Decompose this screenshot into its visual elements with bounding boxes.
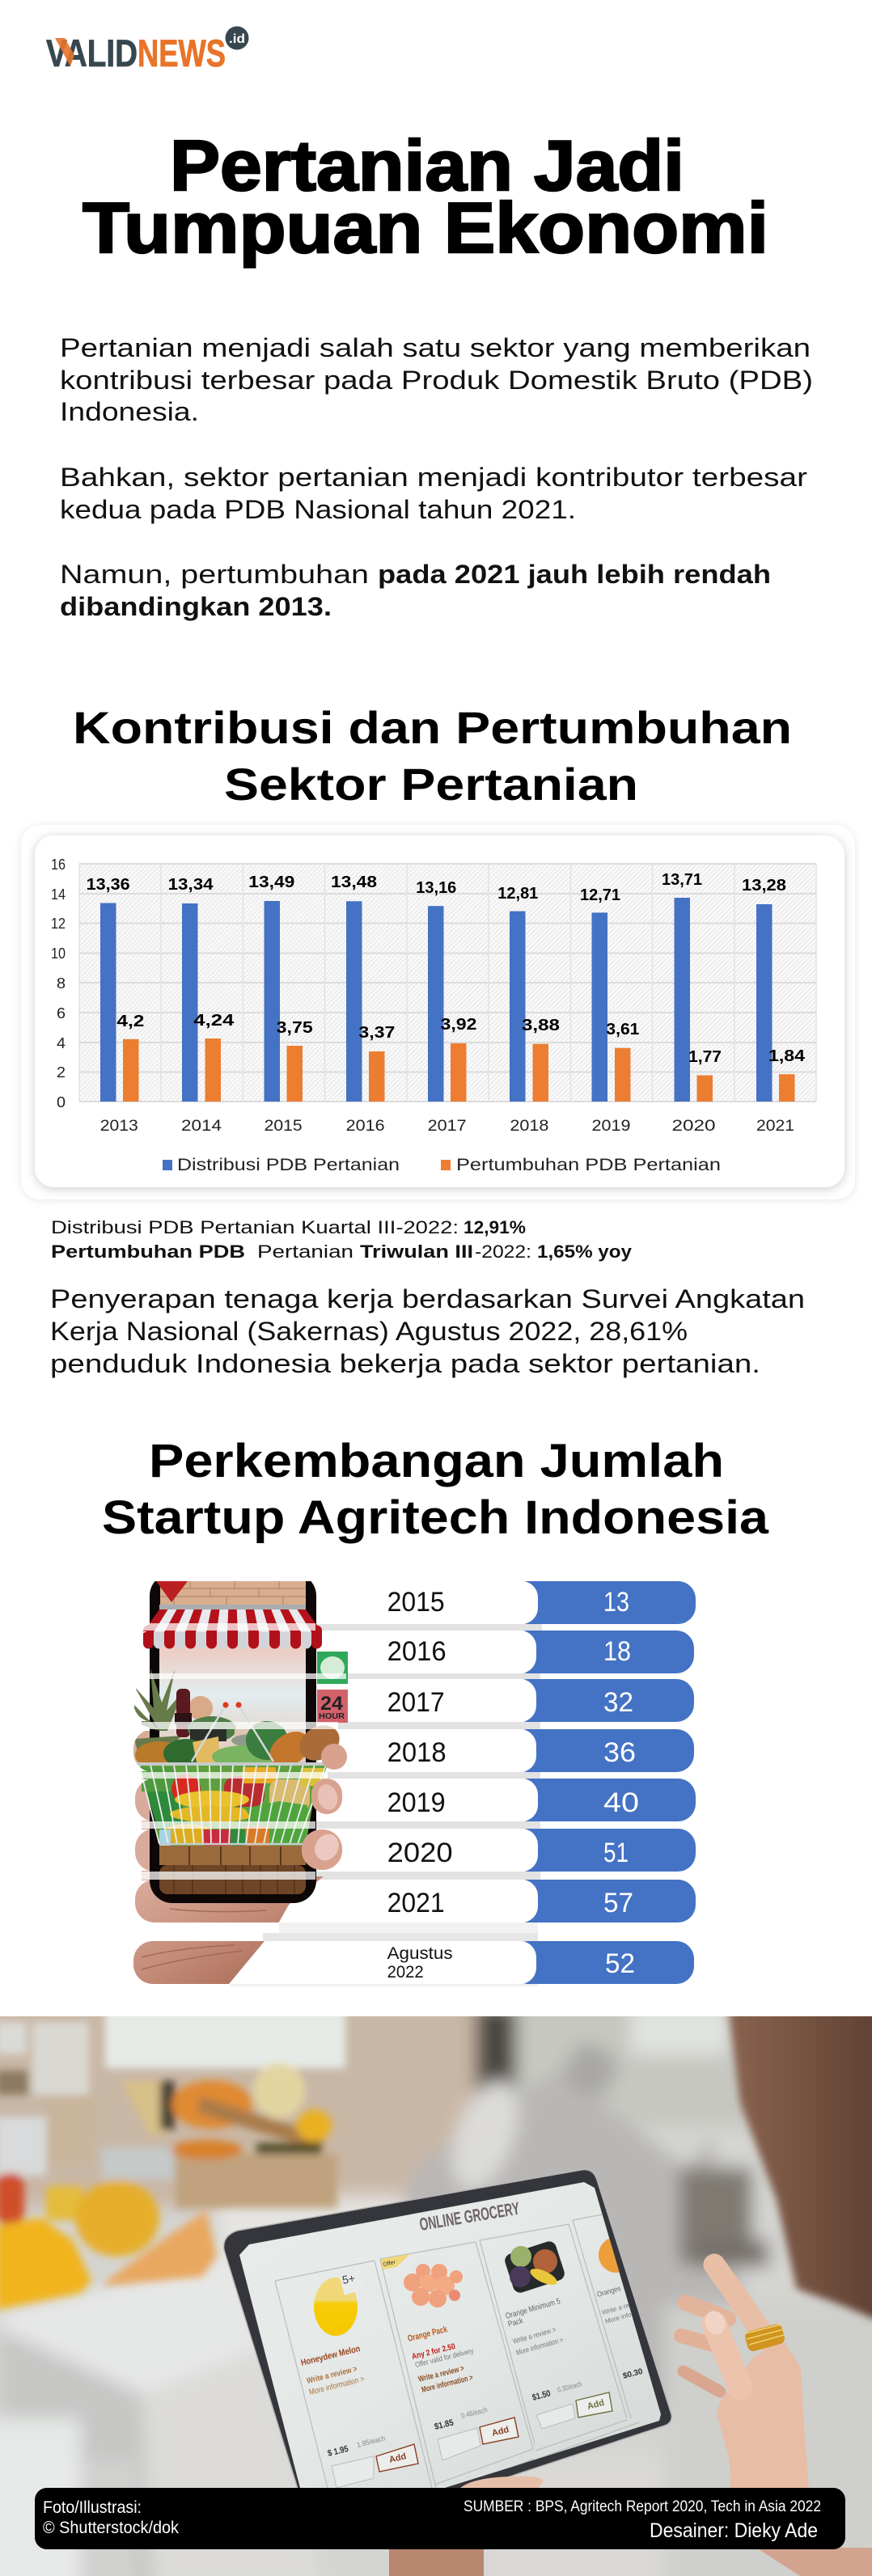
logo: Validnews.id	[46, 26, 249, 74]
product: fruit tray: Orange Minimum 5	[505, 2297, 561, 2321]
phone screen window	[159, 1605, 306, 1766]
side signs: HOUR	[319, 1712, 345, 1721]
source and designer: SUMBER : BPS, Agritech Report 2020, Tech in Asia 2022	[464, 2498, 821, 2515]
product: honeydew melon: Honeydew Melon	[300, 2344, 362, 2368]
product: orange pack	[381, 2254, 519, 2460]
employment paragraph: penduduk Indonesia bekerja pada sektor pertanian.	[50, 1349, 760, 1378]
data labels: distribusi: 12,81	[497, 885, 538, 903]
y axis labels: 14	[51, 886, 66, 903]
data labels: pertumbuhan: 3,88	[522, 1017, 560, 1034]
hand holding tablet	[389, 2477, 872, 2576]
intro text block: kedua pada PDB Nasional tahun 2021.	[60, 495, 576, 524]
intro text block: dibandingkan 2013.	[60, 592, 332, 621]
heading: Perkembangan Jumlah Startup	[102, 1435, 769, 1544]
screen title: ONLINE GROCERY	[418, 2198, 521, 2235]
photo credit: Foto/Illustrasi:	[43, 2498, 142, 2517]
data labels: pertumbuhan: 4,2	[116, 1013, 144, 1030]
stat lines: -2022:	[475, 1241, 531, 1262]
data labels: distribusi	[87, 871, 786, 904]
blurred room background	[0, 1998, 872, 2576]
logo: Validnews.id: .id	[229, 32, 245, 46]
illustration: grocery store phone in hand	[129, 1573, 348, 1984]
data labels: pertumbuhan: 4,24	[193, 1012, 235, 1030]
product: fruit tray: Pack	[507, 2316, 525, 2329]
product: orange pack: More information >	[421, 2373, 474, 2395]
data labels: pertumbuhan: 3,92	[440, 1016, 477, 1034]
phone body	[150, 1573, 316, 1903]
product: oranges: Oranges	[596, 2284, 622, 2299]
employment paragraph: Kerja Nasional (Sakernas) Agustus 2022, 28,61%	[50, 1317, 688, 1346]
title: Tumpuan Ekonomi	[83, 188, 768, 268]
photo: woman shopping for groceries on tablet	[0, 1998, 872, 2576]
stat lines: 1,65% yoy	[537, 1241, 633, 1262]
x axis labels: 2018	[510, 1118, 548, 1135]
photo credit	[43, 2498, 179, 2537]
panel: startup table	[129, 1573, 696, 1986]
x axis labels: 2015	[265, 1118, 303, 1135]
y axis labels: 2	[57, 1064, 66, 1081]
product: orange pack: Offer valid for delivery	[414, 2346, 475, 2369]
source and designer	[464, 2498, 821, 2542]
startup counts: 32	[603, 1687, 633, 1718]
white year pills	[133, 1581, 538, 1984]
y axis labels: 4	[57, 1035, 66, 1051]
woman's raised hand	[681, 2265, 809, 2491]
data labels: pertumbuhan: 3,37	[358, 1024, 395, 1042]
product: orange pack: Orange Pack	[407, 2324, 449, 2344]
stat lines: Triwulan III	[360, 1241, 473, 1262]
heading: Perkembangan Jumlah Startup: Startup Agritech Indonesia	[102, 1491, 769, 1544]
intro text block: Namun, pertumbuhan	[60, 560, 369, 589]
tablet screen content	[275, 2198, 644, 2495]
stat lines: Pertanian	[257, 1241, 353, 1262]
panel: bar chart card	[21, 825, 855, 1199]
heading: Kontribusi dan Pertumbuhan: Sektor Pertanian	[224, 759, 638, 810]
source and designer: Desainer: Dieky Ade	[650, 2519, 818, 2542]
x axis labels: 2019	[592, 1118, 631, 1135]
product: oranges: $0.30	[622, 2367, 644, 2381]
startup counts: 18	[603, 1636, 631, 1667]
y axis labels: 12	[51, 916, 66, 932]
data labels: distribusi: 12,71	[580, 886, 620, 904]
product: fruit tray: $1.50	[531, 2388, 552, 2403]
hand behind phone	[129, 1731, 324, 1984]
x axis labels: 2021	[756, 1118, 794, 1135]
brick wall	[156, 1581, 306, 1609]
product: orange pack: Offer	[383, 2260, 396, 2268]
product: honeydew melon: 1.95/each	[356, 2434, 386, 2449]
hair	[728, 2006, 872, 2325]
logo: Validnews.id: VALID	[46, 32, 138, 74]
tablet	[224, 2169, 671, 2499]
stat lines: Pertumbuhan PDB	[51, 1241, 245, 1262]
wooden shelf	[159, 1846, 306, 1894]
x axis labels: 2020	[671, 1118, 715, 1135]
year labels: 2019	[387, 1787, 446, 1818]
year labels: 2018	[387, 1737, 447, 1768]
intro text block: pada 2021 jauh lebih rendah	[378, 560, 771, 589]
product: oranges: More info	[604, 2311, 633, 2325]
out of focus produce	[0, 2006, 345, 2310]
y axis labels: 0	[57, 1094, 66, 1110]
product: fruit tray: Add	[586, 2398, 605, 2412]
year labels: 2017	[387, 1687, 445, 1718]
product: honeydew melon: Write a review >	[306, 2365, 358, 2386]
data labels: distribusi: 13,71	[662, 871, 702, 889]
footer bar	[35, 2488, 845, 2549]
startup counts: 13	[603, 1587, 629, 1618]
photo credit: © Shutterstock/dok	[43, 2519, 179, 2537]
data labels: pertumbuhan: 1,84	[768, 1047, 806, 1065]
x axis labels	[100, 1118, 794, 1135]
x axis labels: 2014	[181, 1118, 222, 1135]
data labels: pertumbuhan: 1,77	[688, 1048, 722, 1066]
startup counts	[603, 1587, 639, 1979]
fresh produce in basket	[134, 1669, 346, 1846]
employment paragraph: Penyerapan tenaga kerja berdasarkan Survei Angkatan	[50, 1284, 805, 1313]
product: fruit tray: Write a review >	[512, 2325, 557, 2345]
legend: Pertumbuhan PDB Pertanian	[456, 1156, 721, 1174]
data labels: pertumbuhan: 3,75	[277, 1019, 313, 1037]
legend	[163, 1156, 721, 1174]
data labels: distribusi: 13,34	[168, 876, 214, 894]
data labels: pertumbuhan	[116, 1012, 806, 1066]
intro text block: kontribusi terbesar pada Produk Domestik Bruto (PDB)	[60, 366, 813, 395]
data labels: distribusi: 13,16	[416, 879, 456, 897]
year labels	[387, 1587, 453, 1982]
gold ring	[745, 2324, 785, 2351]
legend: Distribusi PDB Pertanian	[177, 1156, 400, 1174]
startup counts: 40	[603, 1787, 639, 1818]
x axis labels: 2013	[100, 1118, 138, 1135]
year labels: 2015	[387, 1587, 445, 1618]
side signs: 24	[320, 1693, 344, 1715]
row shadows	[231, 1623, 542, 1986]
product: honeydew melon	[300, 2270, 418, 2488]
title	[83, 125, 768, 268]
year labels: 2016	[387, 1636, 447, 1667]
stat lines: Distribusi PDB Pertanian Kuartal III-2022:	[51, 1217, 459, 1237]
product: fruit tray: 0.30/each	[557, 2379, 582, 2394]
fingers over phone	[302, 1744, 347, 1870]
logo: Validnews.id: NEWS	[138, 32, 226, 74]
product: fruit tray	[503, 2240, 612, 2429]
intro text block: Pertanian menjadi salah satu sektor yang memberikan	[60, 333, 811, 362]
year labels: 2022	[387, 1963, 424, 1982]
intro text block: Indonesia.	[60, 397, 199, 426]
product: orange pack: Any 2 for 2.50	[411, 2342, 456, 2362]
stat lines	[51, 1217, 633, 1262]
awning	[143, 1609, 322, 1643]
data labels: distribusi: 13,36	[87, 876, 130, 894]
product: honeydew melon: $ 1.95	[327, 2444, 349, 2459]
y axis labels: 6	[57, 1005, 66, 1022]
intro text block: Bahkan, sektor pertanian menjadi kontributor terbesar	[60, 463, 807, 492]
year labels: 2020	[387, 1838, 453, 1868]
y axis labels: 10	[51, 945, 66, 962]
data labels: distribusi: 13,48	[331, 873, 377, 891]
y axis labels: 8	[57, 975, 66, 992]
year labels: Agustus	[387, 1944, 453, 1963]
product: oranges	[596, 2237, 644, 2381]
product: oranges: Write a re	[601, 2302, 630, 2316]
product: honeydew melon: Add	[388, 2451, 407, 2465]
product: honeydew melon: 5+	[341, 2271, 356, 2286]
startup counts: 57	[603, 1888, 633, 1918]
heading: Kontribusi dan Pertumbuhan: Kontribusi dan Pertumbuhan	[73, 702, 792, 753]
row gap haze	[133, 1623, 346, 1880]
product: orange pack: Write a review >	[417, 2364, 465, 2384]
product: honeydew melon: More information >	[308, 2375, 366, 2397]
bar chart plot	[79, 864, 816, 1102]
product: orange pack: $1.85	[434, 2417, 455, 2432]
screen header and card lines	[275, 2212, 639, 2495]
employment paragraph	[50, 1284, 805, 1378]
stat lines: 12,91%	[464, 1217, 526, 1237]
y axis labels	[51, 857, 66, 1110]
x axis labels: 2017	[428, 1118, 467, 1135]
data labels: distribusi: 13,49	[248, 873, 294, 891]
intro text block	[60, 333, 813, 621]
heading: Kontribusi dan Pertumbuhan	[73, 702, 792, 810]
side signs	[317, 1652, 348, 1723]
product: fruit tray: More information >	[515, 2336, 564, 2357]
startup counts: 51	[603, 1838, 629, 1868]
blue value pills	[510, 1581, 696, 1984]
product: orange pack: Add	[491, 2425, 510, 2439]
basket wires and handles	[137, 1702, 328, 1844]
heading: Perkembangan Jumlah Startup: Perkembangan Jumlah	[149, 1435, 724, 1487]
startup counts: 52	[605, 1948, 635, 1979]
y axis labels: 16	[51, 857, 66, 873]
product: orange pack: 0.46/each	[460, 2405, 489, 2420]
data labels: distribusi: 13,28	[742, 877, 786, 895]
data labels: pertumbuhan: 3,61	[606, 1021, 639, 1038]
title: Pertanian Jadi	[170, 125, 684, 205]
year labels: 2021	[387, 1888, 445, 1918]
startup counts: 36	[603, 1737, 636, 1768]
x axis labels: 2016	[346, 1118, 385, 1135]
